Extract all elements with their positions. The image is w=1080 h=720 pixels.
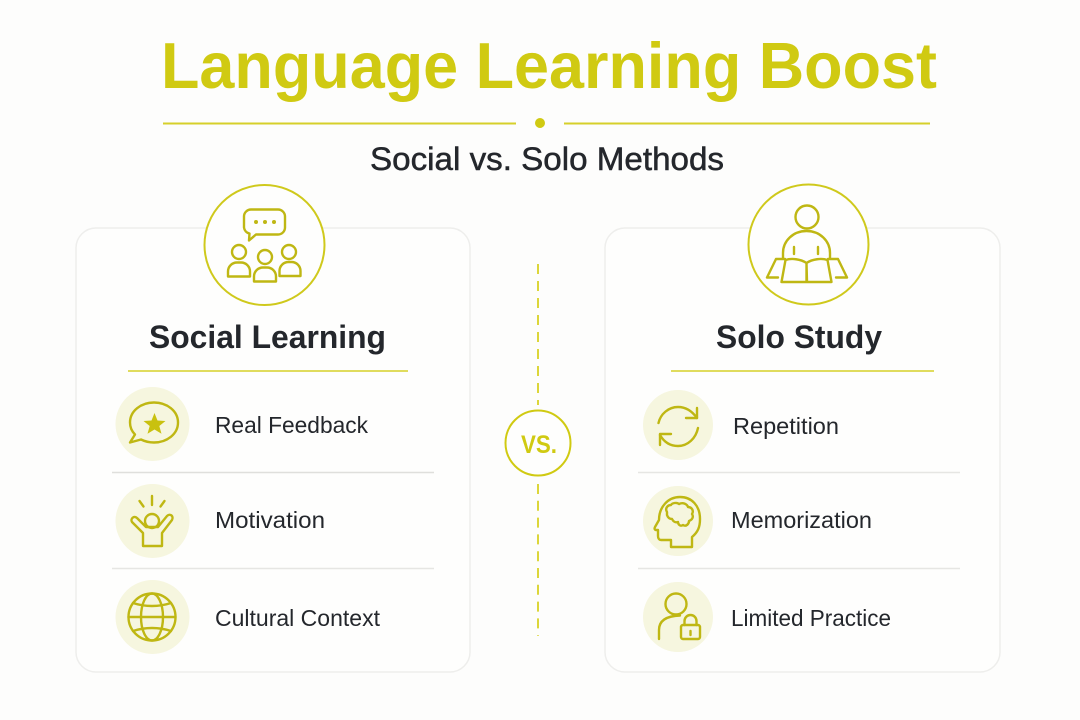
item: motivation <box>116 484 325 558</box>
title divider <box>163 118 930 128</box>
center divider with vs badge <box>506 264 570 636</box>
subtitle: Social vs. Solo Methods <box>370 141 724 177</box>
item: limited practice <box>643 582 891 652</box>
item: cultural context <box>116 580 381 654</box>
item: limited practice: Limited Practice <box>731 605 891 631</box>
panel card <box>76 228 470 672</box>
heading: social learning: Social Learning <box>149 319 386 355</box>
item: memorization <box>643 486 872 556</box>
item: motivation: Motivation <box>215 507 325 533</box>
item: real feedback <box>116 387 368 461</box>
icon: group conversation <box>204 185 324 305</box>
panel: social learning <box>76 185 470 672</box>
heading underline <box>128 370 408 372</box>
vs badge <box>506 410 570 476</box>
item: repetition <box>643 390 839 460</box>
item: cultural context: Cultural Context <box>215 605 381 631</box>
panel: solo study <box>605 184 1000 672</box>
panel card <box>605 228 1000 672</box>
item: real feedback: Real Feedback <box>215 412 368 438</box>
vs badge: VS. <box>521 431 557 459</box>
icon: person reading book <box>748 184 868 304</box>
item: repetition: Repetition <box>733 413 839 439</box>
title: Language Learning Boost <box>161 29 937 102</box>
heading: solo study: Solo Study <box>716 319 882 355</box>
item: memorization: Memorization <box>731 507 872 533</box>
heading underline <box>671 370 934 372</box>
